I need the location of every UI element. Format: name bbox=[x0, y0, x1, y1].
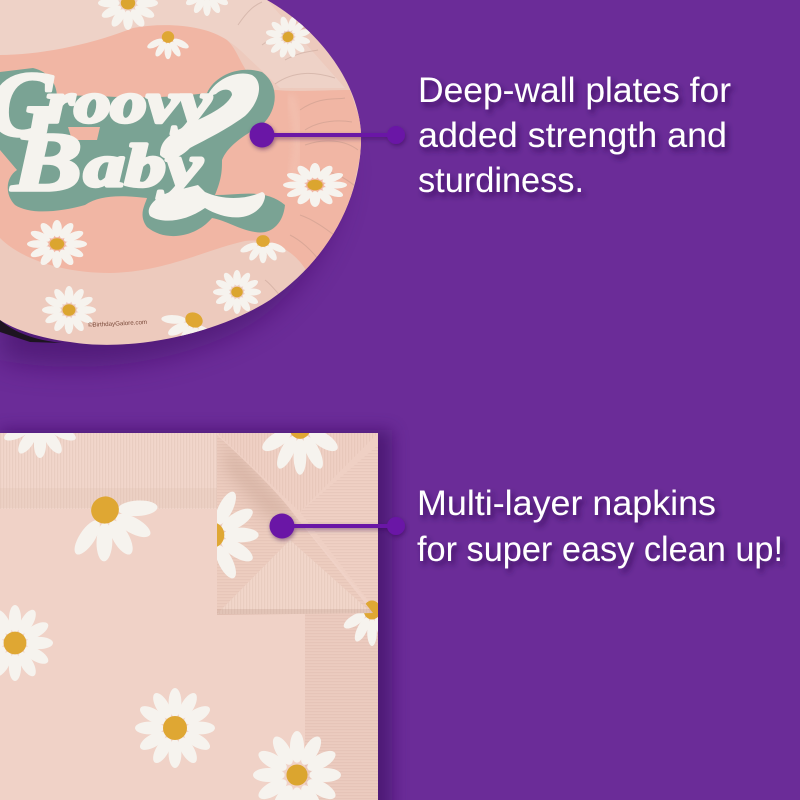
plate rim wrinkles bbox=[238, 2, 358, 302]
callout: napkins connector bbox=[270, 514, 405, 538]
plate shadow bbox=[0, 150, 341, 367]
text: napkins bbox=[417, 484, 783, 569]
text: plates: added strength and bbox=[418, 116, 727, 155]
text: plates: sturdiness. bbox=[418, 161, 584, 200]
logo lettering bbox=[0, 53, 211, 209]
napkin right band bbox=[305, 612, 378, 800]
text: plates: Deep-wall plates for bbox=[418, 71, 731, 110]
napkin folded flap bbox=[217, 435, 373, 615]
napkin corner panel bbox=[217, 433, 378, 613]
logo lettering: B bbox=[11, 116, 82, 209]
plate center panel bbox=[0, 25, 365, 273]
plate copyright: ©BirthdayGalore.com bbox=[88, 319, 147, 329]
text: napkins: Multi-layer napkins bbox=[417, 484, 716, 523]
logo notch bbox=[68, 127, 100, 140]
napkin shadow bbox=[0, 430, 392, 800]
Groovy Baby logo bbox=[0, 53, 285, 236]
logo lettering: roovy bbox=[46, 70, 211, 135]
text: plates bbox=[418, 71, 731, 200]
logo lettering: aby bbox=[84, 133, 202, 199]
logo backing bbox=[0, 68, 285, 236]
text: napkins: for super easy clean up! bbox=[417, 530, 783, 569]
napkin top band bbox=[0, 488, 217, 508]
plate rim highlight bbox=[0, 0, 345, 88]
logo swashes bbox=[149, 74, 265, 221]
paper plate bbox=[0, 0, 365, 359]
napkin bbox=[0, 433, 378, 800]
napkin daisies bbox=[0, 433, 378, 800]
plate daisies bbox=[27, 0, 347, 359]
callout: plates connector bbox=[250, 122, 405, 148]
